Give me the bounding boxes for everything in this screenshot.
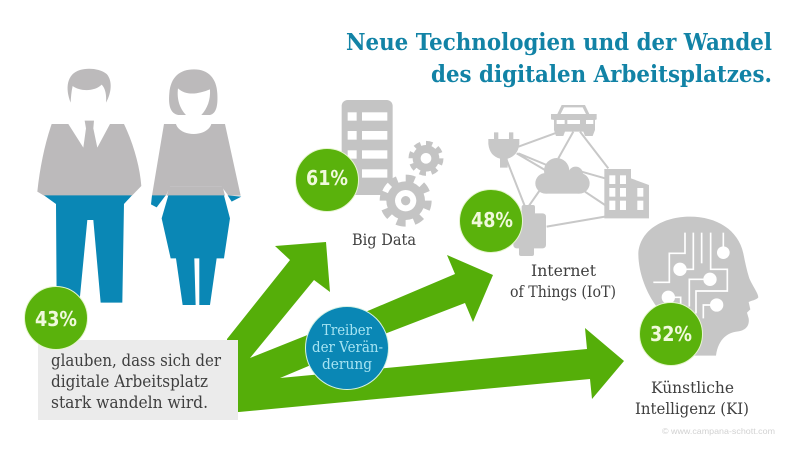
label: Internet of Things [510,261,616,301]
badge: Treiber der Veraenderung: der Verän- [312,338,383,356]
badge: 48 percent [460,190,522,252]
icon: man figure [37,69,141,303]
label: Internet of Things: Internet [531,261,597,280]
text box: 43 percent statement: stark wandeln wird. [51,393,208,412]
badge: Treiber der Veraenderung: Treiber [322,321,373,339]
badge: 32 percent: 32% [650,322,692,346]
title: des digitalen Arbeitsplatzes. [431,61,772,88]
icon: woman figure [151,69,241,305]
text box: 43 percent statement [38,340,238,420]
badge: 61 percent [296,148,358,212]
label: Internet of Things: of Things (IoT) [510,282,616,301]
arrows: three green growth arrows [225,242,624,412]
label: Big Data: Big Data [352,230,416,249]
title: Neue Technologien und der Wandel [346,29,772,56]
badge: 61 percent: 61% [306,166,348,190]
title [346,29,772,88]
icon: big data server and gears [342,100,441,226]
copyright note: © www.campana-schott.com [662,426,775,436]
badge: 43 percent [24,286,88,350]
label: Kuenstliche Intelligenz: Künstliche [651,378,734,397]
badge: Treiber der Veraenderung [306,306,388,390]
badge: 32 percent [640,302,702,366]
label: Kuenstliche Intelligenz [635,378,749,418]
badge: 43 percent: 43% [35,307,77,331]
text box: 43 percent statement: digitale Arbeitsplatz [51,372,208,391]
badge: Treiber der Veraenderung: derung [322,355,372,373]
text box: 43 percent statement: glauben, dass sich der [51,351,221,370]
label: Kuenstliche Intelligenz: Intelligenz (KI) [635,399,749,418]
icon: AI head with circuits [638,217,758,356]
badge: 48 percent: 48% [471,208,513,232]
icon: internet of things network [488,105,649,256]
